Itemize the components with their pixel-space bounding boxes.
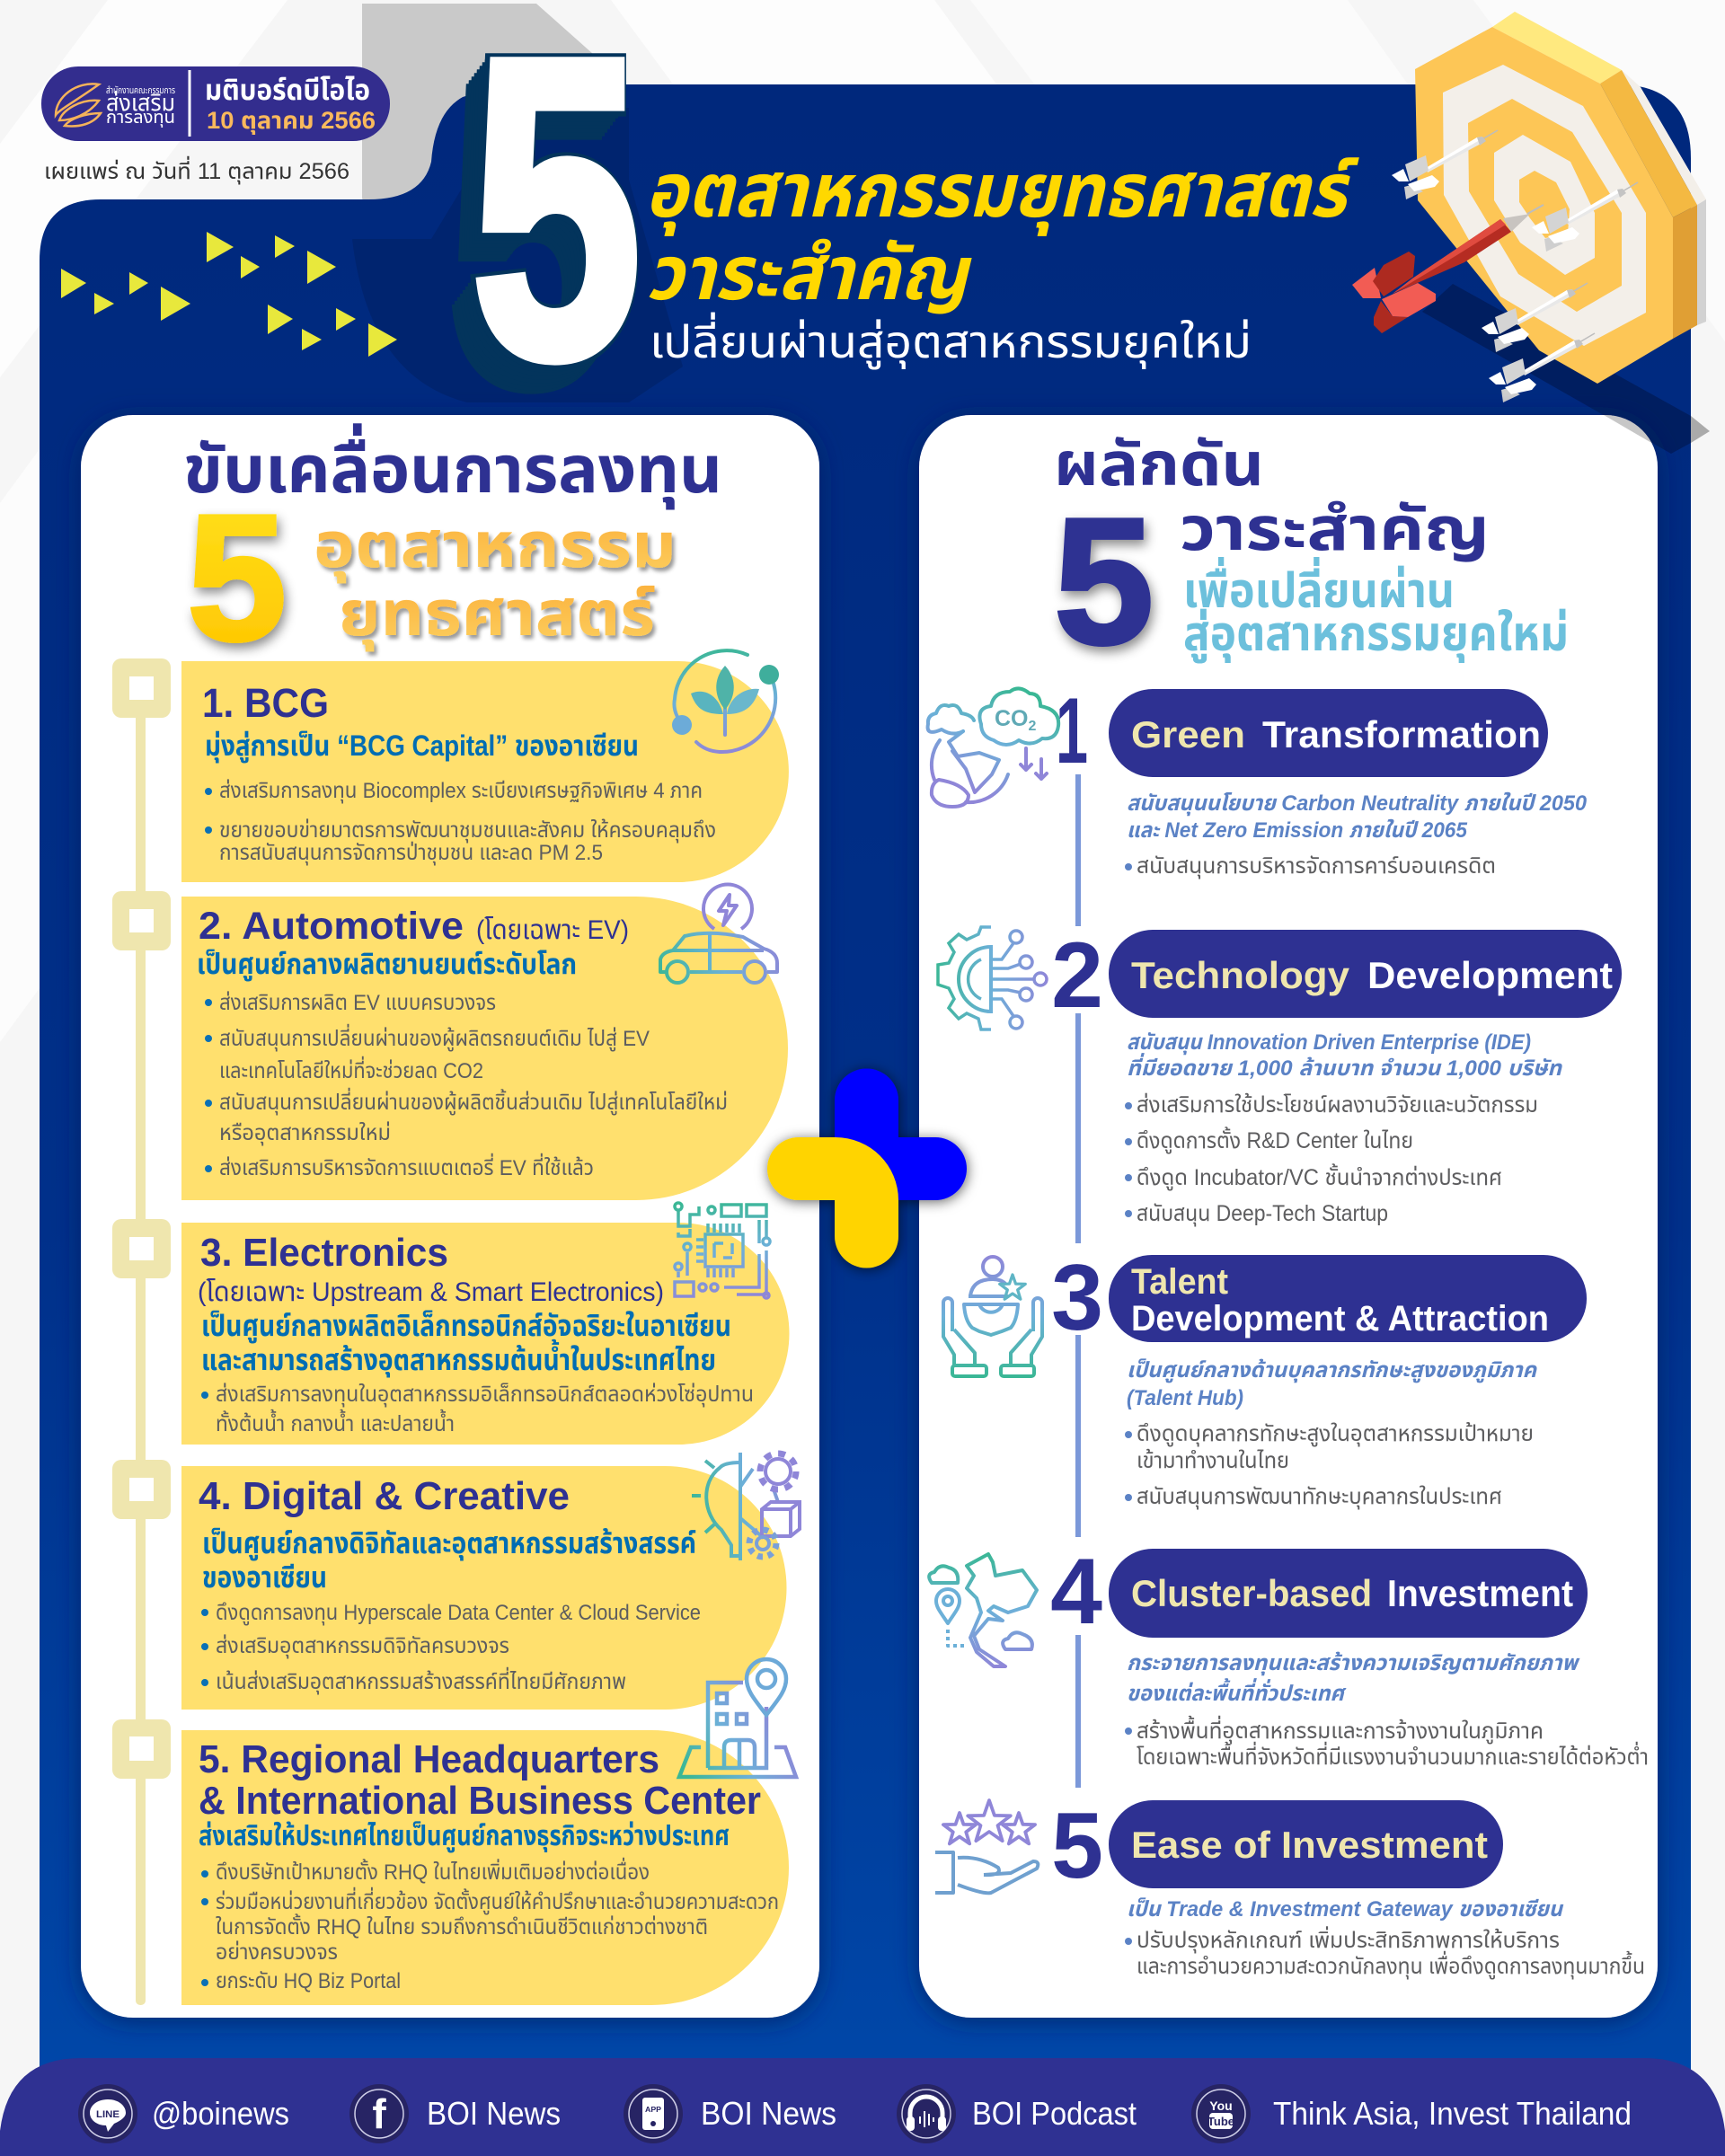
big number 5 with extruded depth: 5 <box>456 0 626 464</box>
icon: hand with three stars <box>935 1800 1038 1893</box>
big number 5 with extruded depth: 5 <box>453 0 624 467</box>
agenda 1: Green Transformation: Green <box>1131 713 1245 755</box>
shadow of dartboard falling on card corner <box>1604 415 1651 443</box>
panel: 3 Electronics: 3. Electronics <box>200 1231 448 1275</box>
main title <box>645 148 1359 369</box>
plus sign between cards <box>767 1069 967 1268</box>
icon: plant cycle <box>672 650 779 752</box>
panel: 5 Regional Headquarters: ส่งเสริมให้ประเทศไทยเป็นศูนย์กลางธุรกิจระหว่างประเทศ <box>199 1820 730 1852</box>
panel: 2 Automotive: สนับสนุนการเปลี่ยนผ่านของผู้ผลิตรถยนต์เดิม ไปสู่ EV <box>219 1023 650 1052</box>
social: App: APP <box>645 2106 662 2114</box>
social: YouTube: You <box>1209 2099 1233 2113</box>
icon: earth and CO2 cloud: 2 <box>1028 719 1037 734</box>
big number 5 navy: 5 <box>1054 482 1154 682</box>
panel: 1 BCG: 1. BCG <box>202 680 329 726</box>
social: App: BOI News <box>701 2095 836 2132</box>
panel: 2 Automotive <box>181 885 788 1200</box>
big number 5 yellow: 5 <box>187 478 287 678</box>
icon: electric car <box>660 885 777 983</box>
social: Facebook: BOI News <box>427 2095 561 2132</box>
heading: push forward: ผลักดัน <box>1054 430 1264 499</box>
agenda 2: Technology Development: ดึงดูดการตั้ง R&D Center ในไทย <box>1137 1126 1413 1154</box>
logo badge: 10 ตุลาคม 2566 <box>207 107 376 135</box>
agenda 5: Ease of Investment: Ease of Investment <box>1131 1824 1488 1866</box>
agenda 1: Green Transformation: 1 <box>1056 679 1088 783</box>
agenda 2: Technology Development: ส่งเสริมการใช้ประโยชน์ผลงานวิจัยและนวัตกรรม <box>1137 1092 1538 1118</box>
icon: hands holding person and gear <box>943 1257 1042 1376</box>
agenda 4: Cluster-based Investment: 4 <box>1050 1540 1102 1644</box>
agenda 4: Cluster-based Investment: Cluster-based <box>1131 1572 1372 1614</box>
panel: right agenda card <box>919 404 1658 2018</box>
agenda 5: Ease of Investment <box>935 1794 1645 1980</box>
icon: half bulb and gears <box>692 1453 800 1560</box>
icon: red dart <box>1352 205 1544 333</box>
panel: 5 Regional Headquarters: 5. Regional Headquarters <box>199 1737 659 1781</box>
social: Podcast <box>897 2084 1137 2143</box>
panel: 2 Automotive: หรืออุตสาหกรรมใหม่ <box>219 1120 391 1146</box>
panel: 1 BCG: การสนับสนุนการจัดการป่าชุมชน และลด PM 2.5 <box>219 841 603 866</box>
agenda 2: Technology Development: สนับสนุน Deep-Tech Startup <box>1137 1201 1388 1227</box>
logo badge: ส่งเสริม <box>106 89 175 116</box>
agenda 3: Talent Development and Attraction: (Talent Hub) <box>1127 1386 1243 1410</box>
agenda 2: Technology Development: Development <box>1367 954 1613 996</box>
timeline rail <box>112 658 171 2005</box>
panel: 2 Automotive: เป็นศูนย์กลางผลิตยานยนต์ระดับโลก <box>197 948 577 981</box>
panel: 2 Automotive: 2. Automotive <box>199 905 464 948</box>
panel: 5 Regional Headquarters: อย่างครบวงจร <box>216 1940 338 1965</box>
agenda 3: Talent Development and Attraction: ดึงดูดบุคลากรทักษะสูงในอุตสาหกรรมเป้าหมาย <box>1137 1421 1534 1447</box>
agenda 4: Cluster-based Investment: โดยเฉพาะพื้นที่จังหวัดที่มีแรงงานจำนวนมากและรายได้ต่อหัวต่ำ <box>1137 1741 1649 1770</box>
social: Facebook <box>349 2084 561 2143</box>
yellow triangle decorations <box>61 232 397 357</box>
panel: 5 Regional Headquarters: & International Business Center <box>199 1779 761 1823</box>
agenda 4: Cluster-based Investment <box>929 1540 1649 1770</box>
logo badge: สำนักงานคณะกรรมการ <box>106 85 175 96</box>
icon: white darts <box>1392 130 1638 402</box>
panel: 2 Automotive: (โดยเฉพาะ EV) <box>476 915 629 945</box>
panel: 2 Automotive: ส่งเสริมการผลิต EV แบบครบวงจร <box>219 990 496 1015</box>
social: LINE: @boinews <box>152 2095 289 2132</box>
panel: 4 Digital and Creative: เน้นส่งเสริมอุตสาหกรรมสร้างสรรค์ที่ไทยมีศักยภาพ <box>216 1666 626 1695</box>
panel: 4 Digital and Creative: ของอาเซียน <box>202 1560 327 1594</box>
agenda 2: Technology Development <box>938 923 1622 1227</box>
agenda 5: Ease of Investment: เป็น Trade & Investment Gateway ของอาเซียน <box>1127 1897 1563 1922</box>
agenda 4: Cluster-based Investment: สร้างพื้นที่อุตสาหกรรมและการจ้างงานในภูมิภาค <box>1137 1715 1544 1745</box>
agenda 2: Technology Development: ที่มียอดขาย 1,000 ล้านบาท จำนวน 1,000 บริษัท <box>1127 1053 1563 1081</box>
agenda 3: Talent Development and Attraction: สนับสนุนการพัฒนาทักษะบุคลากรในประเทศ <box>1137 1484 1502 1510</box>
main title: วาระสำคัญ <box>646 231 972 315</box>
grey shadow wedge at panel edge <box>1691 416 1710 443</box>
agenda 4: Cluster-based Investment: กระจายการลงทุนและสร้างความเจริญตามศักยภาพ <box>1127 1651 1580 1676</box>
heading: 5 key agendas <box>1180 495 1569 663</box>
agenda 5: Ease of Investment: ปรับปรุงหลักเกณฑ์ เพิ่มประสิทธิภาพการให้บริการ <box>1137 1925 1560 1954</box>
agenda 1: Green Transformation: และ Net Zero Emission ภายในปี 2065 <box>1127 818 1468 843</box>
panel: 4 Digital and Creative: เป็นศูนย์กลางดิจิทัลและอุตสาหกรรมสร้างสรรค์ <box>202 1526 696 1561</box>
agenda 3: Talent Development and Attraction: Talent <box>1131 1262 1228 1302</box>
panel: 1 BCG <box>181 650 789 882</box>
panel: 4 Digital and Creative: 4. Digital & Creative <box>199 1474 570 1518</box>
agenda 4: Cluster-based Investment: Investment <box>1387 1572 1573 1614</box>
panel: left investment card <box>81 415 819 2018</box>
social: Podcast: BOI Podcast <box>972 2095 1137 2132</box>
publish date: เผยแพร่ ณ วันที่ 11 ตุลาคม 2566 <box>44 155 349 185</box>
agenda 3: Talent Development and Attraction: 3 <box>1051 1246 1103 1350</box>
social: LINE <box>78 2084 289 2143</box>
logo badge: การลงทุน <box>106 108 175 128</box>
grey wedge behind big number <box>362 4 593 270</box>
panel: 2 Automotive: และเทคโนโลยีใหม่ที่จะช่วยลด CO2 <box>219 1056 483 1083</box>
panel: 2 Automotive: สนับสนุนการเปลี่ยนผ่านของผู้ผลิตชิ้นส่วนเดิม ไปสู่เทคโนโลยีใหม่ <box>219 1087 728 1116</box>
social: App <box>624 2084 836 2143</box>
icon: circuit chip <box>675 1203 770 1298</box>
panel: 3 Electronics: ทั้งต้นน้ำ กลางน้ำ และปลายน้ำ <box>216 1409 455 1436</box>
agenda 3: Talent Development and Attraction <box>943 1246 1587 1510</box>
agenda 5: Ease of Investment: และการอำนวยความสะดวกนักลงทุน เพื่อดึงดูดการลงทุนมากขึ้น <box>1137 1950 1645 1980</box>
panel: 3 Electronics <box>181 1203 789 1445</box>
icon: earth and CO2 cloud: CO <box>995 706 1028 731</box>
heading: 5 key agendas: เพื่อเปลี่ยนผ่าน <box>1183 557 1455 618</box>
footer band <box>0 2058 1725 2156</box>
social: YouTube <box>1191 2084 1632 2143</box>
agenda 2: Technology Development: 2 <box>1051 923 1103 1028</box>
agenda 1: Green Transformation <box>928 679 1588 879</box>
main title: เปลี่ยนผ่านสู่อุตสาหกรรมยุคใหม่ <box>650 312 1252 369</box>
panel: 3 Electronics: เป็นศูนย์กลางผลิตอิเล็กทรอนิกส์อัจฉริยะในอาเซียน <box>201 1309 731 1344</box>
panel: 3 Electronics: และสามารถสร้างอุตสาหกรรมต้นน้ำในประเทศไทย <box>201 1339 716 1378</box>
icon: butterfly logo <box>56 84 101 126</box>
agenda 4: Cluster-based Investment: ของแต่ละพื้นที่ทั่วประเทศ <box>1127 1678 1347 1706</box>
agenda 3: Talent Development and Attraction: เข้ามาทำงานในไทย <box>1137 1448 1289 1473</box>
panel: 3 Electronics: (โดยเฉพาะ Upstream & Smart Electronics) <box>198 1277 664 1307</box>
heading: 5 strategic industries <box>314 510 677 651</box>
heading: 5 strategic industries: อุตสาหกรรม <box>314 510 677 583</box>
panel: 4 Digital and Creative: ดึงดูดการลงทุน Hyperscale Data Center & Cloud Service <box>216 1601 701 1626</box>
logo badge: มติบอร์ดบีโอไอ <box>205 74 370 106</box>
timeline connector lines <box>1075 774 1081 1788</box>
logo badge <box>41 66 390 141</box>
agenda 2: Technology Development: สนับสนุน Innovation Driven Enterprise (IDE) <box>1127 1030 1531 1056</box>
social: Facebook: f <box>372 2090 386 2137</box>
panel: 1 BCG: ขยายขอบข่ายมาตรการพัฒนาชุมชนและสังคม ให้ครอบคลุมถึง <box>219 817 716 844</box>
agenda 2: Technology Development: Technology <box>1131 954 1350 996</box>
agenda 1: Green Transformation: สนับสนุนการบริหารจัดการคาร์บอนเครดิต <box>1137 853 1496 879</box>
big number 5 with extruded depth: 5 <box>450 0 621 471</box>
social: YouTube: Think Asia, Invest Thailand <box>1273 2095 1632 2132</box>
social: YouTube: Tube <box>1208 2115 1234 2128</box>
panel: 2 Automotive: ส่งเสริมการบริหารจัดการแบตเตอรี่ EV ที่ใช้แล้ว <box>219 1153 594 1180</box>
panel: 5 Regional Headquarters: ในการจัดตั้ง RHQ ในไทย รวมถึงการดำเนินชีวิตแก่ชาวต่างชาติ <box>216 1913 708 1940</box>
panel: 5 Regional Headquarters: ร่วมมือหน่วยงานที่เกี่ยวข้อง จัดตั้งศูนย์ให้คำปรึกษาและอำนวยความสะดวก <box>216 1886 779 1915</box>
heading: 5 key agendas: สู่อุตสาหกรรมยุคใหม่ <box>1183 607 1569 663</box>
icon: building with location pin <box>679 1659 796 1777</box>
panel: 1 BCG: ส่งเสริมการลงทุน Biocomplex ระเบียงเศรษฐกิจพิเศษ 4 ภาค <box>219 778 703 804</box>
heading: 5 strategic industries: ยุทธศาสตร์ <box>339 579 655 651</box>
icon: half gear with circuit nodes <box>938 927 1047 1029</box>
agenda 3: Talent Development and Attraction: Development & Attraction <box>1131 1299 1549 1339</box>
icon: dartboard target with darts <box>1352 12 1706 454</box>
agenda 1: Green Transformation: Transformation <box>1262 713 1541 755</box>
icon: Thailand map with pin <box>929 1554 1037 1666</box>
big number 5 with extruded depth: 5 <box>447 0 618 474</box>
heading: drive investment: ขับเคลื่อนการลงทุน <box>183 423 722 510</box>
heading: 5 key agendas: วาระสำคัญ <box>1180 495 1490 563</box>
panel: 4 Digital and Creative <box>181 1453 800 1710</box>
panel: 5 Regional Headquarters: ดึงบริษัทเป้าหมายตั้ง RHQ ในไทยเพิ่มเติมอย่างต่อเนื่อง <box>216 1857 650 1885</box>
panel: 4 Digital and Creative: ส่งเสริมอุตสาหกรรมดิจิทัลครบวงจร <box>216 1633 509 1659</box>
agenda 5: Ease of Investment: 5 <box>1051 1794 1103 1898</box>
panel: 5 Regional Headquarters: ยกระดับ HQ Biz Portal <box>216 1969 401 1993</box>
icon: earth and CO2 cloud <box>928 688 1058 807</box>
panel: 1 BCG: มุ่งสู่การเป็น “BCG Capital” ของอาเซียน <box>205 729 639 763</box>
panel: 5 Regional Headquarters <box>181 1659 796 2005</box>
agenda 2: Technology Development: ดึงดูด Incubator/VC ชั้นนำจากต่างประเทศ <box>1137 1162 1502 1191</box>
social: LINE: LINE <box>96 2109 119 2120</box>
panel: 3 Electronics: ส่งเสริมการลงทุนในอุตสาหกรรมอิเล็กทรอนิกส์ตลอดห่วงโซ่อุปทาน <box>216 1382 754 1408</box>
agenda 1: Green Transformation: สนับสนุนนโยบาย Carbon Neutrality ภายในปี 2050 <box>1127 791 1588 817</box>
dark shadow behind big number <box>352 108 683 402</box>
agenda 3: Talent Development and Attraction: เป็นศูนย์กลางด้านบุคลากรทักษะสูงของภูมิภาค <box>1127 1358 1537 1383</box>
main title: อุตสาหกรรมยุทธศาสตร์ <box>645 148 1359 236</box>
